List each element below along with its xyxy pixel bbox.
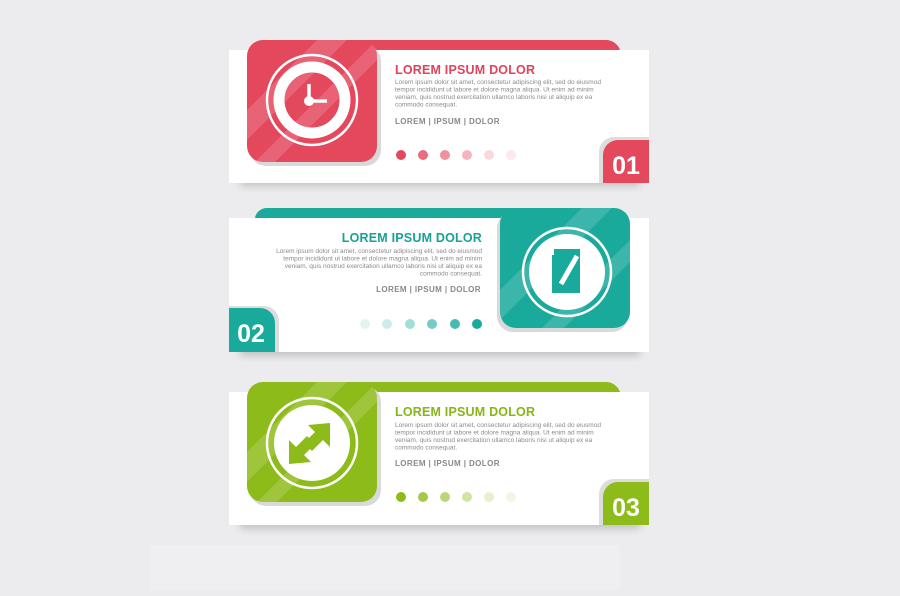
body text 3: veniam, quis nostrud exercitation ullamco laboris nisi ut aliquip ex ea [395,437,593,444]
body text 1: veniam, quis nostrud exercitation ullamco laboris nisi ut aliquip ex ea [395,94,593,101]
dots 1 [396,150,516,160]
body text 3: tempor incididunt ut labore et dolore magna aliqua. Ut enim ad minim [395,430,594,436]
tags 2: LOREM | IPSUM | DOLOR [376,285,481,294]
body text 3: Lorem ipsum dolor sit amet, consectetur adipiscing elit, sed do eiusmod [395,422,601,429]
number badge 02 [229,306,279,352]
tags 3: LOREM | IPSUM | DOLOR [395,459,500,468]
title 3: LOREM IPSUM DOLOR [395,405,535,419]
number badge 02: 02 [237,320,265,348]
body text 1: Lorem ipsum dolor sit amet, consectetur adipiscing elit, sed do eiusmod [395,79,601,86]
body text 3: commodo consequat. [395,444,457,452]
body text 2: Lorem ipsum dolor sit amet, consectetur adipiscing elit, sed do eiusmod [276,248,482,255]
body text 2: commodo consequat. [420,270,482,278]
number badge 03 [599,479,649,525]
number badge 01: 01 [612,152,640,180]
body text 1: tempor incididunt ut labore et dolore magna aliqua. Ut enim ad minim [395,86,594,94]
icon panel: document with pencil [500,208,630,330]
title 1: LOREM IPSUM DOLOR [395,63,535,77]
tags 1: LOREM | IPSUM | DOLOR [395,117,500,126]
dots 2 [360,319,482,329]
number badge 03: 03 [612,494,640,522]
card 1 [229,40,649,186]
body text 2: veniam, quis nostrud exercitation ullamco laboris nisi ut aliquip ex ea [285,263,482,270]
title 2: LOREM IPSUM DOLOR [342,231,482,245]
dots 3 [396,492,516,502]
card 3 [229,382,649,529]
number badge 01 [599,137,649,183]
body text 2: tempor incididunt ut labore et dolore magna aliqua. Ut enim ad minim [283,256,482,262]
icon panel: clock [247,40,377,170]
card 2 [229,208,649,356]
icon panel: arrows [247,382,377,512]
body text 1: commodo consequat. [395,102,457,108]
